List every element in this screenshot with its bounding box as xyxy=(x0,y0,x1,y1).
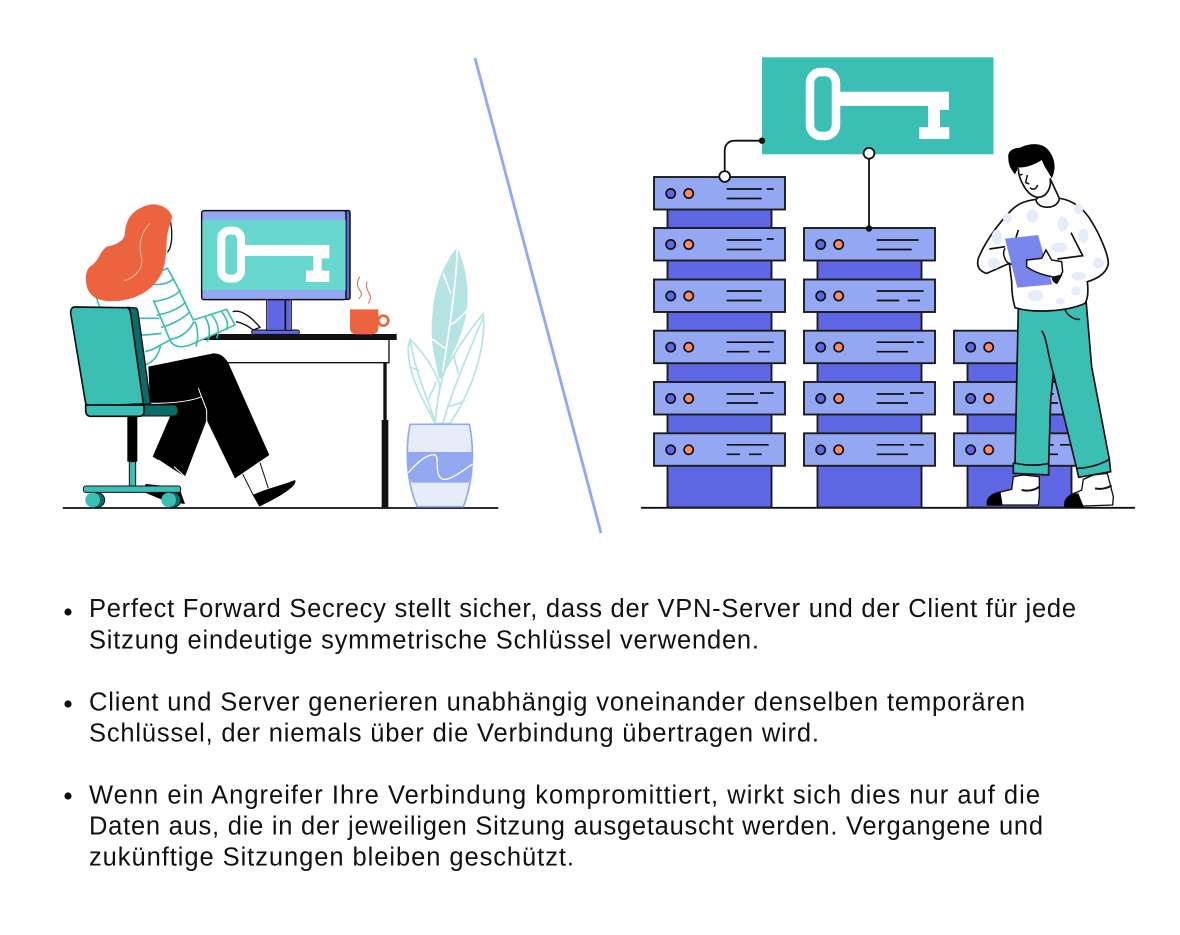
sweater spots xyxy=(988,204,1104,305)
trousers xyxy=(1013,300,1111,477)
ground line right xyxy=(641,507,1135,509)
desk xyxy=(160,334,397,507)
man with clipboard xyxy=(978,144,1113,507)
bullet 1 xyxy=(64,595,1076,655)
bullet 2 xyxy=(64,688,1025,748)
bullet list xyxy=(64,595,1076,872)
potted plant xyxy=(407,247,484,507)
bullet 3: zukünftige Sitzungen bleiben geschützt. xyxy=(89,844,574,872)
hair xyxy=(1008,144,1055,178)
bullet 3: Wenn ein Angreifer Ihre Verbindung kompromittiert, wirkt sich dies nur auf die xyxy=(89,781,1040,809)
hand on keyboard xyxy=(233,311,260,330)
plant pot xyxy=(407,424,473,507)
connector: key to server 2 xyxy=(864,148,874,232)
illustration: client at desk xyxy=(63,204,498,508)
shoes xyxy=(987,473,1113,507)
black trousers xyxy=(148,353,269,478)
coffee cup with steam xyxy=(350,277,388,334)
key panel xyxy=(762,57,994,154)
diagonal divider xyxy=(475,58,601,533)
ground line left xyxy=(63,505,498,510)
striped sweater xyxy=(97,268,260,365)
illustration: key and servers xyxy=(641,57,1135,508)
bullet 3 xyxy=(64,781,1043,872)
server column 1 xyxy=(654,177,785,508)
plant leaves xyxy=(408,247,484,423)
hand xyxy=(1027,250,1063,282)
upper body xyxy=(978,144,1108,319)
face and neck xyxy=(1018,168,1059,207)
feet and shoes xyxy=(143,459,295,507)
office chair xyxy=(71,307,181,507)
bullet 2: Schlüssel, der niemals über die Verbindung übertragen wird. xyxy=(89,720,819,748)
sweater xyxy=(978,198,1108,311)
monitor with key xyxy=(202,211,350,334)
red hair xyxy=(86,204,172,301)
server column 3 xyxy=(954,331,1085,508)
bullet 3: Daten aus, die in der jeweiligen Sitzung ausgetauscht werden. Vergangene und xyxy=(89,813,1043,841)
bullet 1: Perfect Forward Secrecy stellt sicher, dass der VPN-Server und der Client für jede xyxy=(89,595,1076,623)
bullet 1: Sitzung eindeutige symmetrische Schlüssel verwenden. xyxy=(89,627,759,655)
bullet 2: Client und Server generieren unabhängig voneinander denselben temporären xyxy=(89,688,1025,716)
server column 2 xyxy=(804,228,935,508)
connector: key to server 1 xyxy=(719,138,765,182)
